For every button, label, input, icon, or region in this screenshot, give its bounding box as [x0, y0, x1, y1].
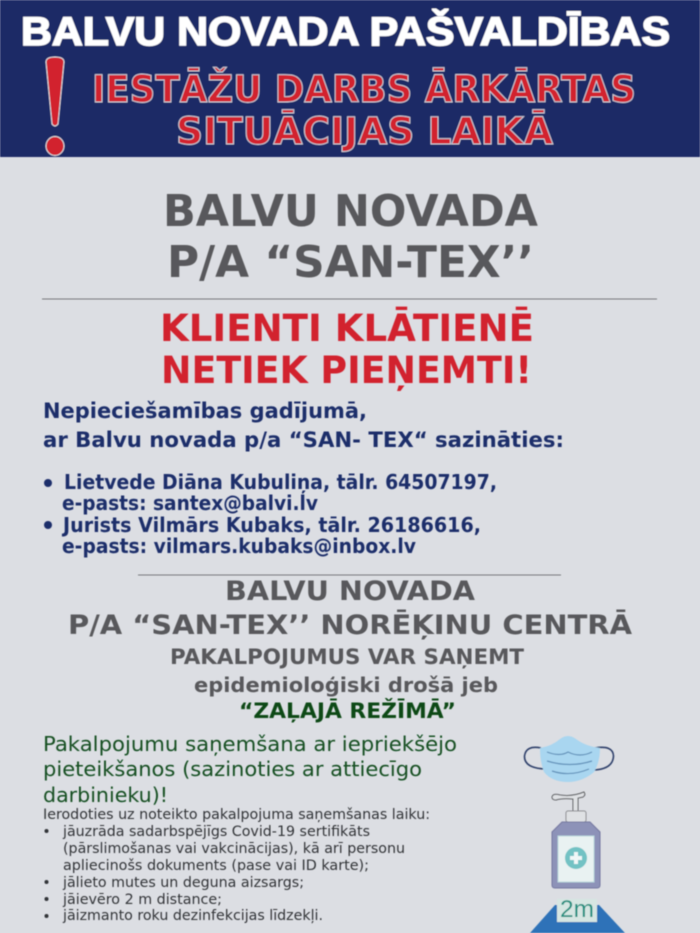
contact list [44, 470, 497, 558]
subtitle: red heading: SITUĀCIJAS LAIKĀ [176, 109, 553, 153]
contact list: e-pasts: santex@balvi.lv [62, 491, 318, 515]
icon: 2 m distance marker: 2m [560, 896, 594, 923]
icon: hand sanitiser bottle [552, 792, 600, 888]
title: municipality: BALVU NOVADA PAŠVALDĪBAS [21, 8, 670, 54]
green regime label: “ZAĻAJĀ REŽĪMĀ” [239, 698, 456, 723]
contact intro: ar Balvu novada p/a “SAN- TEX“ sazināties: [43, 428, 564, 452]
icon: red exclamation mark [46, 57, 64, 156]
green note: prior registration: darbinieku)! [43, 783, 168, 807]
requirements list [43, 807, 430, 924]
subtitle: red heading: IESTĀŽU DARBS ĀRKĀRTAS [92, 67, 636, 111]
contact intro: Nepieciešamības gadījumā, [43, 399, 367, 423]
warning: clients not received in person: NETIEK PIEŅEMTI! [161, 349, 532, 392]
heading: billing centre: PAKALPOJUMUS VAR SAŅEMT [170, 645, 525, 669]
requirements list: jāuzrāda sadarbspējīgs Covid-19 sertifikāts [62, 824, 370, 840]
contact list: Jurists Vilmārs Kubaks, tālr. 26186616, [61, 513, 481, 537]
warning: clients not received in person [160, 306, 534, 392]
requirements list: jāizmanto roku dezinfekcijas līdzekļi. [62, 908, 323, 924]
contact intro [43, 399, 564, 452]
heading: billing centre [68, 576, 632, 697]
heading: institution name [163, 186, 538, 288]
requirements list: apliecinošs dokuments (pase vai ID karte); [63, 858, 369, 874]
green note: prior registration: Pakalpojumu saņemšana ar iepriekšējo [43, 732, 457, 756]
subtitle: red heading [92, 67, 636, 153]
requirements list: jālieto mutes un deguna aizsargs; [62, 875, 304, 891]
icon: face mask [524, 736, 614, 782]
header banner [0, 0, 700, 157]
heading: billing centre: P/A “SAN-TEX’’ NORĒĶINU CENTRĀ [68, 609, 632, 641]
heading: billing centre: BALVU NOVADA [225, 576, 475, 607]
requirements list: jāievēro 2 m distance; [62, 892, 222, 908]
heading: billing centre: epidemioloģiski drošā jeb [194, 673, 498, 697]
icon: 2 m distance marker [530, 896, 625, 933]
contact list: e-pasts: vilmars.kubaks@inbox.lv [62, 534, 416, 558]
warning: clients not received in person: KLIENTI KLĀTIENĒ [160, 306, 534, 350]
contact list: Lietvede Diāna Kubuliņa, tālr. 64507197, [64, 470, 497, 494]
heading: institution name: P/A “SAN-TEX’’ [167, 237, 534, 288]
requirements list: (pārslimošanas vai vakcinācijas), kā arī personu [63, 841, 405, 857]
requirements list: Ierodoties uz noteikto pakalpojuma saņemšanas laiku: [43, 807, 430, 823]
green note: prior registration [43, 732, 457, 807]
green note: prior registration: pieteikšanos (sazinoties ar attiecīgo [43, 757, 422, 781]
heading: institution name: BALVU NOVADA [163, 186, 538, 237]
